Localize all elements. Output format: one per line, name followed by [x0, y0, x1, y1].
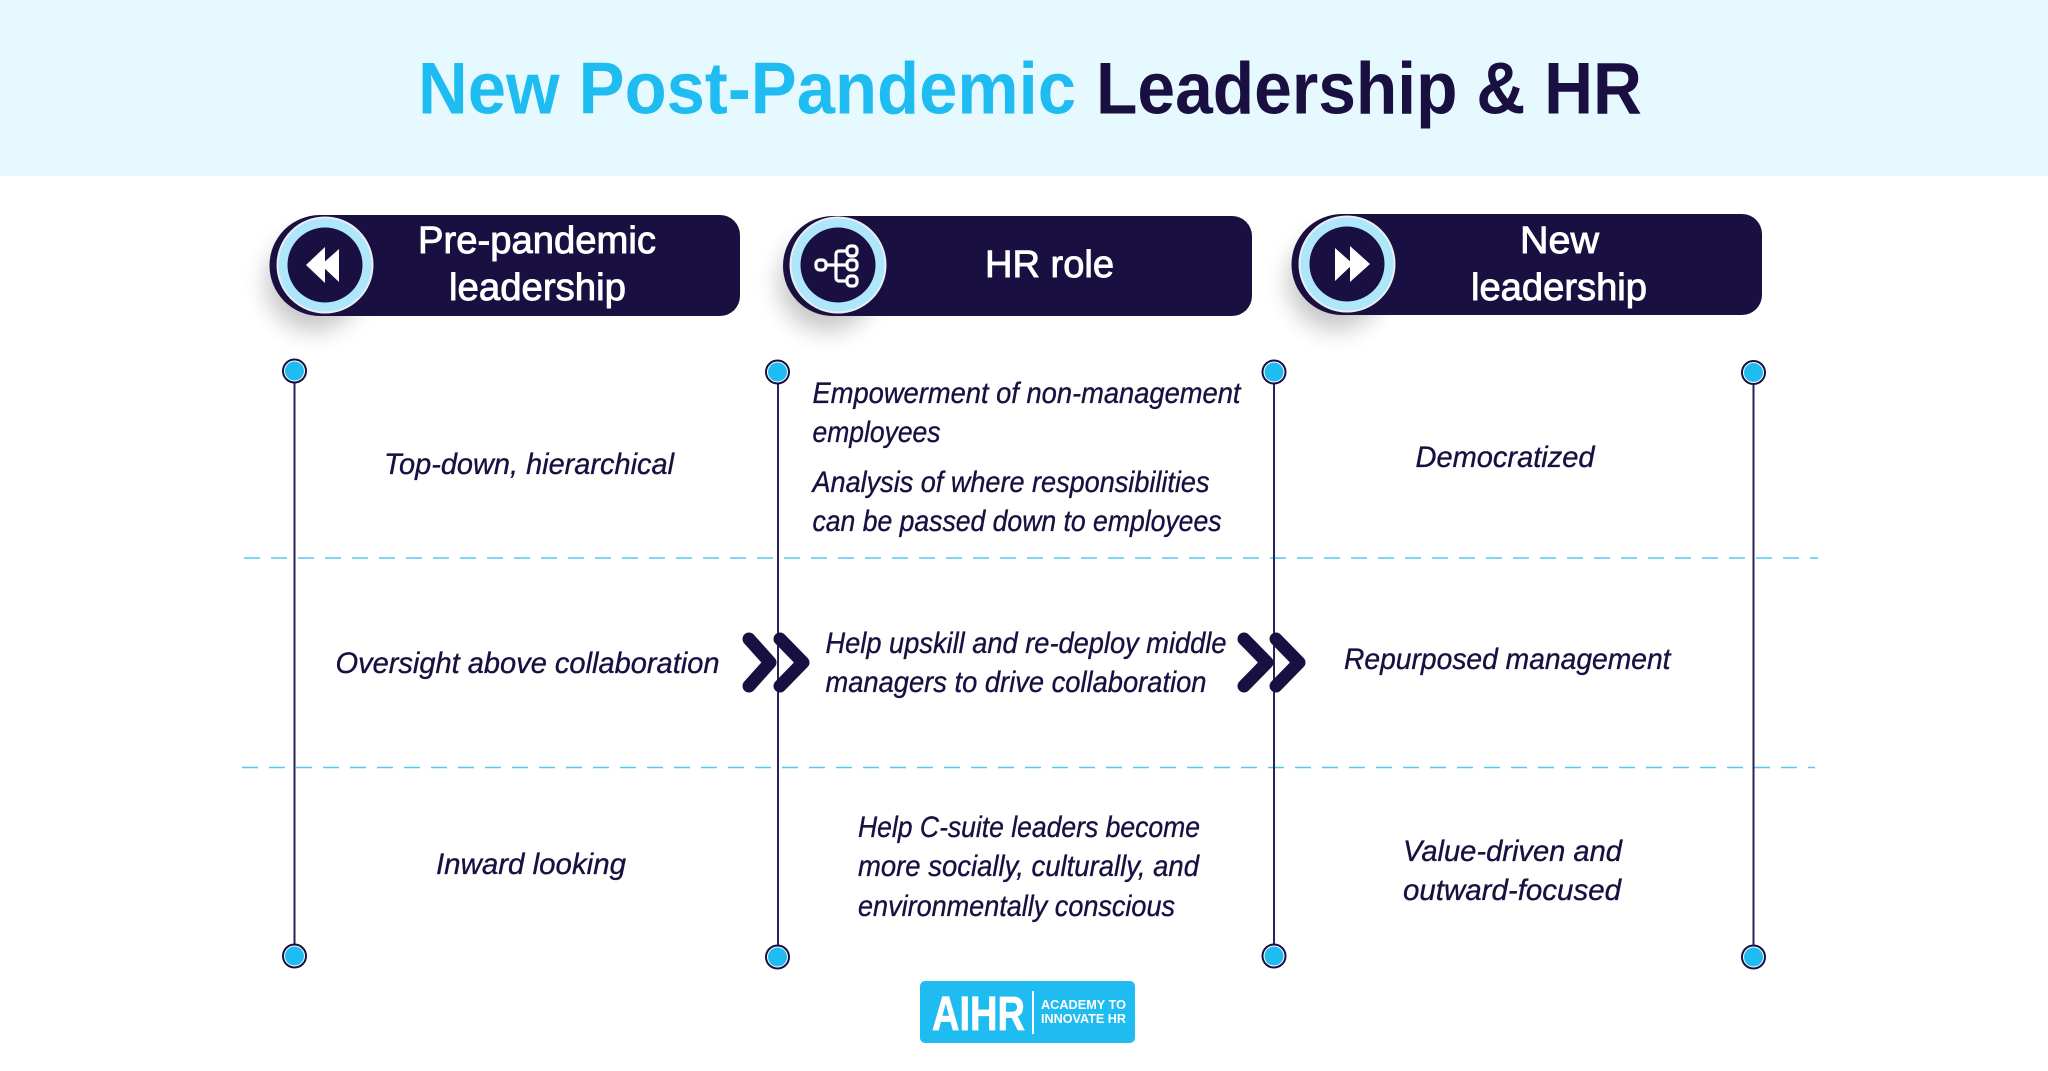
column 2 text	[811, 377, 1242, 923]
header label	[418, 220, 656, 309]
AIHR logo: ACADEMY TO	[1041, 998, 1126, 1012]
AIHR logo: INNOVATE HR	[1041, 1012, 1126, 1026]
column 1 text: Oversight above collaboration	[336, 647, 720, 680]
icon: rewind	[306, 247, 339, 283]
column 3 text: Repurposed management	[1344, 643, 1672, 676]
dashed row dividers	[242, 558, 1818, 768]
column 1 text	[336, 448, 720, 881]
column 2 text: Analysis of where responsibilities	[811, 466, 1210, 499]
column timeline 4	[1742, 361, 1765, 968]
title: Leadership & HR	[1096, 48, 1642, 130]
column 1 text: Top-down, hierarchical	[384, 448, 675, 481]
column 2 text: employees	[812, 416, 940, 449]
column 3 text: Democratized	[1416, 441, 1596, 474]
icon: org network	[816, 246, 857, 286]
column timeline 2	[766, 360, 789, 968]
column 3 text: outward-focused	[1403, 874, 1622, 907]
header label: HR role	[985, 244, 1114, 286]
title banner	[0, 0, 2048, 176]
column timeline 3	[1262, 360, 1286, 968]
column 3 text: Value-driven and	[1403, 835, 1623, 868]
column timeline 1	[283, 360, 306, 968]
title: New Post-Pandemic	[418, 48, 1076, 130]
icon: fast forward	[1335, 246, 1370, 282]
column 2 text: Help C-suite leaders become	[858, 811, 1200, 844]
AIHR logo: AIHR	[932, 988, 1025, 1041]
header: pre-pandemic leadership	[266, 215, 740, 331]
header label	[1471, 220, 1647, 309]
column 3 text	[1344, 441, 1672, 907]
header label: leadership	[1471, 267, 1647, 309]
column 2 text: Empowerment of non-management	[812, 377, 1242, 410]
column 2 text: can be passed down to employees	[812, 505, 1222, 538]
arrow: chevrons into HR role	[749, 639, 803, 686]
header label: Pre-pandemic	[418, 220, 656, 262]
column 2 text: Help upskill and re-deploy middle	[826, 627, 1226, 660]
arrow: chevrons into new leadership	[1244, 639, 1299, 686]
header: HR role	[779, 216, 1252, 331]
column 2 text: environmentally conscious	[858, 890, 1175, 923]
column 2 text: more socially, culturally, and	[858, 850, 1200, 883]
header label: New	[1520, 220, 1600, 262]
column 2 text: managers to drive collaboration	[826, 666, 1206, 699]
column 1 text: Inward looking	[436, 848, 626, 881]
header label: leadership	[449, 267, 626, 309]
header: new leadership	[1288, 214, 1762, 330]
AIHR logo	[920, 981, 1135, 1043]
